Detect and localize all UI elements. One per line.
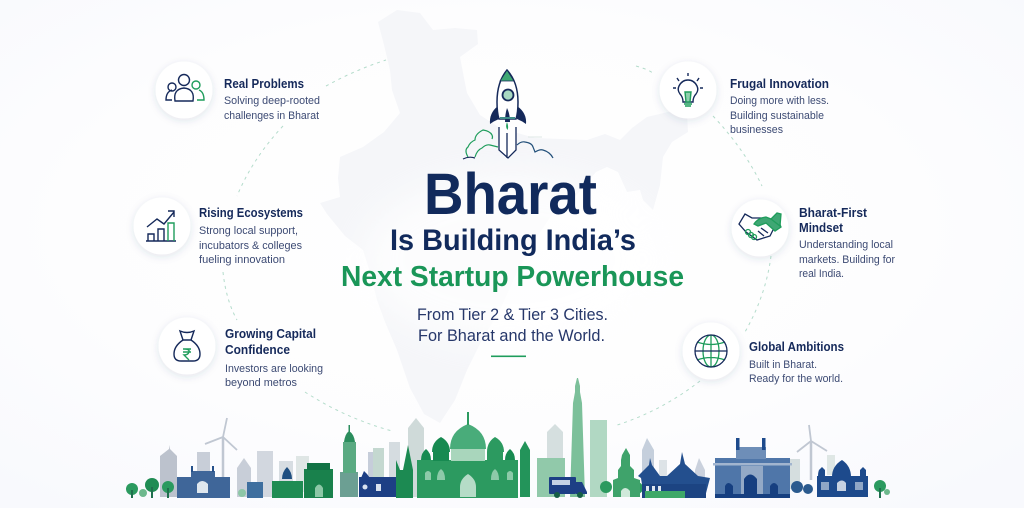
- nose cone: [500, 70, 514, 81]
- item: Frugal Innovation: Doing more with less.: [730, 95, 829, 107]
- blue block: [247, 482, 263, 498]
- item: Frugal Innovation: [660, 62, 829, 136]
- item: Real Problems: challenges in Bharat: [224, 110, 319, 122]
- domed monument: [417, 412, 518, 498]
- icon: rising chart: [134, 198, 190, 254]
- title block: [341, 162, 684, 357]
- item: Bharat-First Mindset: [732, 200, 895, 280]
- city skyline: [125, 378, 900, 498]
- pagoda with trees: [600, 448, 643, 497]
- domed mausoleum: [817, 460, 868, 497]
- green rule: [491, 356, 526, 357]
- item: Growing Capital Confidence: [158, 318, 323, 389]
- fins: [490, 106, 499, 124]
- clock tower: [340, 425, 358, 497]
- green palace with blue dome: [272, 463, 333, 498]
- item: Bharat-First Mindset: Understanding local: [799, 239, 893, 251]
- tall tower and low block: [537, 378, 607, 497]
- icon: handshake: [732, 200, 788, 256]
- trees left: [126, 478, 246, 498]
- item: Rising Ecosystems: Strong local support,: [199, 225, 298, 237]
- ground line: [125, 496, 900, 498]
- item: Real Problems: Solving deep-rooted: [224, 95, 320, 107]
- item: Growing Capital Confidence: beyond metros: [225, 377, 297, 389]
- item: Bharat-First Mindset: real India.: [799, 268, 844, 280]
- trees right: [791, 480, 890, 498]
- title line 3: Next Startup Powerhouse: [341, 261, 684, 293]
- flame: [506, 122, 508, 130]
- blue palace: [359, 471, 396, 497]
- item: Frugal Innovation: Frugal Innovation: [730, 77, 829, 91]
- clouds: [466, 130, 492, 157]
- item: Bharat-First Mindset: markets. Building for: [799, 254, 895, 266]
- item: Global Ambitions: Ready for the world.: [749, 373, 843, 385]
- item: Rising Ecosystems: fueling innovation: [199, 254, 285, 266]
- item: Bharat-First Mindset: Mindset: [799, 221, 844, 235]
- title line 1: Bharat: [424, 162, 597, 227]
- body: [497, 70, 518, 119]
- centre fin: [505, 108, 510, 122]
- grand gateway: [713, 438, 792, 498]
- title block: For Bharat and the World.: [418, 327, 605, 345]
- blue temple: [638, 452, 710, 498]
- icon: people: [156, 62, 212, 118]
- item: Growing Capital Confidence: Confidence: [225, 343, 290, 357]
- item: Global Ambitions: [682, 322, 844, 385]
- left gateway: [177, 466, 230, 498]
- India map silhouette: [320, 10, 688, 423]
- wind turbine right: [797, 425, 827, 480]
- window: [502, 90, 514, 100]
- dashed connector ring: [223, 60, 771, 431]
- item: Global Ambitions: Built in Bharat.: [749, 359, 817, 371]
- item: Rising Ecosystems: Rising Ecosystems: [199, 206, 303, 220]
- item: Rising Ecosystems: [134, 198, 303, 266]
- title line 2: Is Building India’s: [390, 224, 636, 257]
- icon: globe: [682, 322, 740, 380]
- item: Growing Capital Confidence: Growing Capital: [225, 327, 316, 341]
- subtitle: From Tier 2 & Tier 3 Cities.: [417, 306, 608, 324]
- rocket illustration: [463, 70, 553, 159]
- wind turbine left: [205, 418, 237, 477]
- flame trail: [499, 127, 516, 158]
- item: Growing Capital Confidence: Investors are looking: [225, 363, 323, 375]
- minaret: [520, 441, 530, 497]
- delivery truck: [549, 477, 587, 498]
- item: Bharat-First Mindset: Bharat-First: [799, 206, 868, 220]
- pale background towers: [160, 418, 835, 497]
- item: Frugal Innovation: Building sustainable: [730, 110, 824, 122]
- icon: light bulb: [660, 62, 716, 118]
- item: Rising Ecosystems: incubators & colleges: [199, 240, 302, 252]
- item: Real Problems: Real Problems: [224, 77, 304, 91]
- item: Frugal Innovation: businesses: [730, 124, 783, 136]
- icon: money bag: [158, 318, 216, 374]
- item: Real Problems: [156, 62, 320, 122]
- item: Global Ambitions: Global Ambitions: [749, 340, 844, 354]
- green spire: [396, 445, 413, 498]
